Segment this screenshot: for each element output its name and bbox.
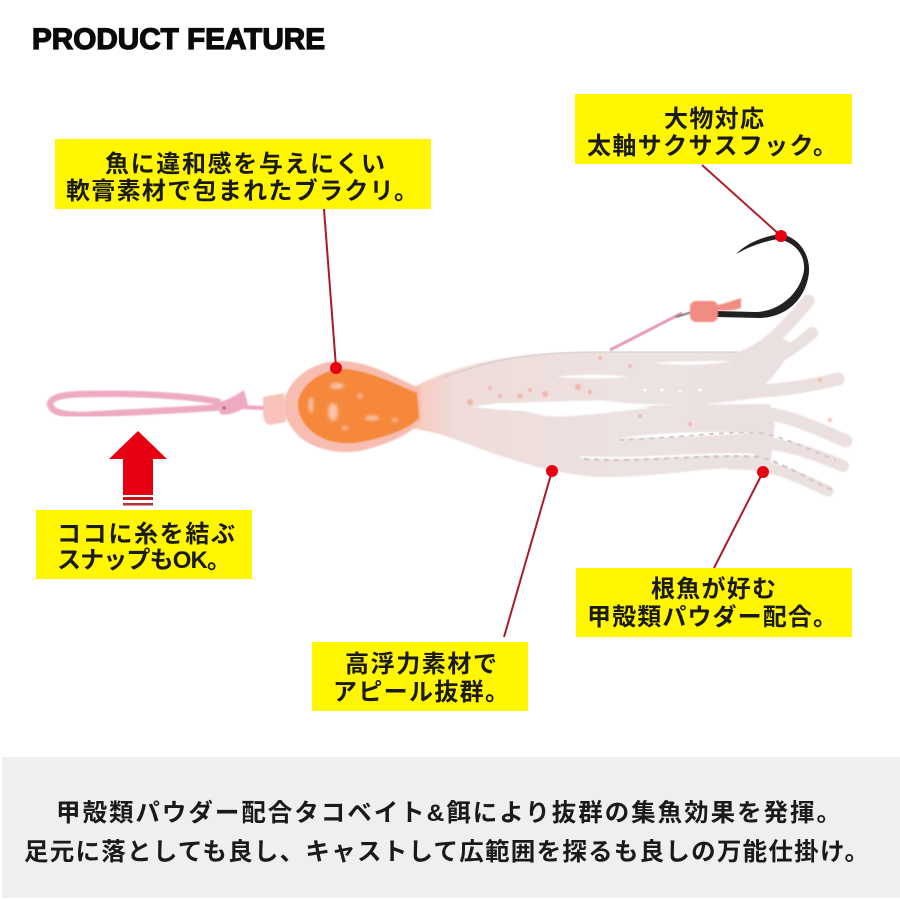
tentacle tips <box>730 301 846 491</box>
tentacle gaps <box>505 361 755 458</box>
callout: soft sinker: 魚に違和感を与えにくい <box>105 151 385 178</box>
line loop and knot <box>50 390 264 415</box>
sinker head <box>283 361 422 452</box>
pointer: crustacean powder <box>714 466 769 568</box>
callout: high buoyancy: 高浮力素材で <box>345 651 497 678</box>
tentacle speckles <box>467 356 832 426</box>
summary line 2: 足元に落としても良し、キャストして広範囲を探るも良しの万能仕掛け。 <box>24 838 869 866</box>
callout: crustacean powder <box>576 568 852 637</box>
sinker eyelet <box>263 393 286 425</box>
arrow <box>109 431 167 506</box>
upper tentacle mass <box>412 336 795 415</box>
callout: crustacean powder: 根魚が好む <box>651 575 776 603</box>
callout: high buoyancy: アピール抜群。 <box>333 679 509 706</box>
bottom summary band <box>2 757 900 898</box>
callout: line attachment: スナップもOK。 <box>57 547 231 574</box>
callout: high buoyancy <box>312 642 528 711</box>
summary line 1: 甲殻類パウダー配合タコベイト&餌により抜群の集魚効果を発揮。 <box>56 798 841 827</box>
product image: octopus bait rig <box>50 234 846 491</box>
tentacle scalloped edges <box>445 352 835 490</box>
title: PRODUCT FEATURE <box>32 23 325 56</box>
callout: hook: 太軸サクサスフック。 <box>587 133 837 160</box>
pointer: hook <box>702 165 787 242</box>
callout: soft sinker <box>55 139 431 209</box>
pointer: high buoyancy <box>504 465 558 637</box>
pointer: sinker <box>324 209 342 374</box>
hook eye bobbin <box>676 298 741 322</box>
hook leader line <box>610 313 682 350</box>
callout: crustacean powder: 甲殻類パウダー配合。 <box>587 603 837 631</box>
hook <box>717 234 809 318</box>
callout: soft sinker: 軟膏素材で包まれたブラクリ。 <box>66 177 418 205</box>
callout: hook <box>575 94 852 164</box>
callout: line attachment <box>36 510 252 579</box>
lower tentacle mass <box>412 404 775 477</box>
callout: line attachment: ココに糸を結ぶ <box>57 521 235 548</box>
tentacles <box>412 301 846 491</box>
callout: hook: 大物対応 <box>664 106 764 133</box>
